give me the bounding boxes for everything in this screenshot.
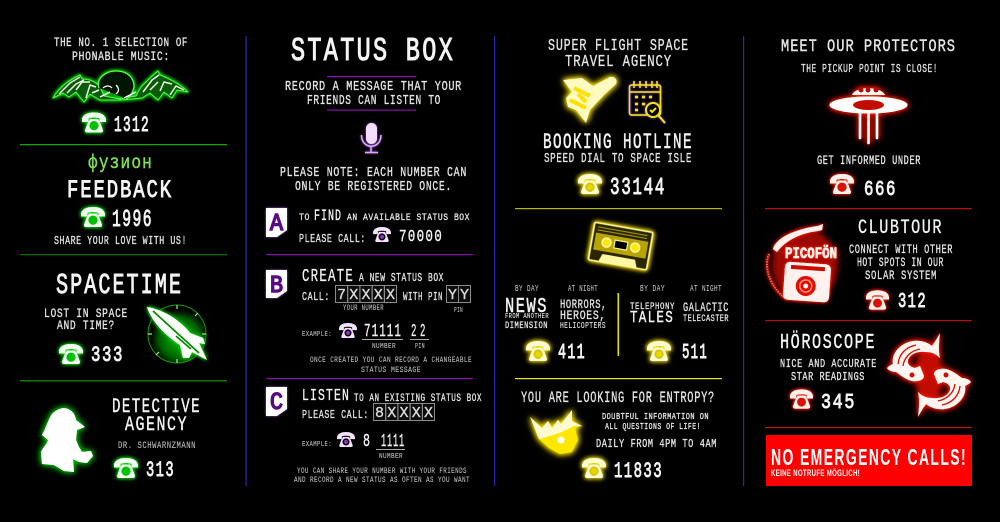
text: please note: ONLY BE REGISTERED ONCE. (295, 180, 452, 195)
text: record a message: RECORD A MESSAGE THAT YOUR (285, 80, 462, 95)
number example: 8 (363, 432, 370, 452)
text: connect (849, 243, 953, 283)
text: you can share: YOU CAN SHARE YOUR NUMBER WITH YOUR FRIENDS (297, 466, 467, 476)
icon: phone (526, 341, 550, 361)
program 511 labels (630, 284, 729, 328)
text: daily hours: DAILY FROM 4PM TO 4AM (596, 438, 717, 451)
callout: no emergency calls: KEINE NOTRUFE MÖGLICH! (771, 468, 860, 479)
program 511 labels: TELECASTER (683, 314, 729, 325)
panel: spacetime (44, 269, 207, 368)
text: star readings: NICE AND ACCURATE (780, 357, 877, 371)
panel: step C listen: 1111 (381, 432, 405, 452)
text: once created: STATUS MESSAGE (361, 365, 421, 375)
digit boxes: listen number: 8XXXX (375, 405, 433, 422)
heading: meet our protectors: MEET OUR PROTECTORS (781, 37, 956, 57)
icon: microphone (362, 123, 381, 152)
caption: your number: YOUR NUMBER (343, 304, 384, 313)
panel: feedback (54, 152, 187, 248)
program 411 labels: AT NIGHT (568, 284, 598, 294)
heading: status box: STATUS BOX (291, 33, 455, 70)
text: record a message (285, 80, 462, 109)
icon: phone (337, 432, 355, 447)
number 411: 411 (558, 342, 586, 365)
text: to find: FIND (314, 207, 342, 225)
icon: rocket clock (147, 305, 207, 363)
text: you can share: AND RECORD A NEW STATUS AS OFTEN AS YOU WANT (294, 475, 470, 485)
text: lost in space: AND TIME? (57, 318, 115, 333)
heading: horoscope: HÖROSCOPE (780, 331, 876, 355)
text: call: CALL: (302, 290, 330, 304)
text: once created (310, 355, 472, 375)
digit boxes: number: 7XXXX (337, 287, 395, 304)
program 511 labels: AT NIGHT (690, 284, 722, 294)
text: listen (302, 387, 482, 406)
number 345: 345 (821, 392, 856, 415)
panel: step B create: 22 (411, 322, 429, 342)
panel: phonable music (53, 35, 188, 138)
icon: red telephone (767, 224, 838, 303)
captions: number pin (372, 343, 425, 351)
panel: protectors (781, 37, 956, 202)
heading: clubtour: CLUBTOUR (858, 217, 943, 240)
program 411 labels: HORRORS, (560, 297, 607, 312)
text: please note: PLEASE NOTE: EACH NUMBER CAN (280, 166, 467, 181)
heading: looking for entropy: YOU ARE LOOKING FOR ENTROPY? (521, 389, 715, 407)
panel: status box intro (280, 33, 467, 195)
text: you can share (294, 466, 470, 485)
caption: number: NUMBER (379, 453, 403, 461)
number 313: 313 (146, 458, 175, 483)
heading: spacetime: SPACETIME (56, 269, 183, 302)
number example (363, 432, 405, 452)
icon: badge B: B (270, 273, 283, 300)
program 411 labels: FROM ANOTHER (505, 313, 549, 321)
icon: phone (647, 341, 671, 361)
heading: feedback: FEEDBACK (67, 176, 173, 205)
program 411 labels: NEWS (505, 296, 548, 319)
icon: phone (59, 344, 83, 364)
captions: number pin: NUMBER (372, 343, 396, 351)
text: doubtful information (602, 411, 709, 432)
text: once created: ONCE CREATED YOU CAN RECORD A CHANGEABLE (310, 355, 472, 365)
icon: ufo (830, 88, 908, 143)
text: to find: AN AVAILABLE STATUS BOX (347, 212, 470, 224)
number 11833: 11833 (614, 459, 663, 484)
icon: phone (373, 227, 391, 242)
text: doctor name: DR. SCHWARNZMANN (118, 440, 196, 452)
number 70000: 70000 (399, 228, 443, 247)
text: star readings: STAR READINGS (791, 370, 865, 384)
icon: badge C: C (270, 390, 283, 417)
text: create: CREATE (302, 267, 354, 287)
number 511: 511 (682, 342, 708, 365)
text: doubtful information: ALL QUESTIONS OF LIFE! (605, 421, 701, 432)
icon: phone (578, 174, 602, 194)
panel: space travel agency (543, 37, 693, 202)
text: please call: PLEASE CALL: (302, 408, 369, 422)
panel: step C listen (266, 387, 482, 485)
number 1996: 1996 (112, 207, 153, 234)
text: speed dial: SPEED DIAL TO SPACE ISLE (544, 152, 692, 167)
program 411 labels: DIMENSION (505, 320, 548, 332)
icon: badge A (266, 208, 287, 238)
icon: badge B (266, 270, 287, 300)
icon: phone (81, 207, 105, 227)
icon: detective silhouette (41, 408, 93, 472)
panel: entropy (521, 389, 717, 484)
icon: phone (82, 112, 106, 132)
icon: space shuttle (563, 77, 617, 123)
caption: pin: PIN (454, 307, 463, 315)
heading: detective agency: AGENCY (125, 414, 188, 437)
panel: detective agency (41, 396, 201, 483)
text: lost in space (44, 306, 128, 333)
icon: phone (866, 290, 889, 310)
heading: super flight space: SUPER FLIGHT SPACE (548, 37, 689, 56)
number 1312: 1312 (114, 113, 150, 138)
program 511 labels: GALACTIC (683, 301, 729, 315)
heading: detective agency (112, 396, 201, 437)
text: create (302, 267, 444, 287)
text: connect: CONNECT WITH OTHER (849, 243, 953, 257)
text: to find: TO (299, 213, 310, 224)
text: record a message: FRIENDS CAN LISTEN TO (307, 94, 441, 109)
icon: spiky creature (530, 410, 582, 454)
number 312: 312 (898, 291, 927, 314)
text: listen: LISTEN (302, 387, 350, 406)
text: star readings (780, 357, 877, 384)
heading: super flight space (548, 37, 689, 72)
icon: winged skull (53, 71, 188, 102)
panel: step A find (266, 207, 470, 247)
icon: badge C (266, 387, 287, 417)
icon: phone (114, 458, 138, 478)
icon: phone (830, 174, 854, 194)
heading: booking hotline: BOOKING HOTLINE (543, 130, 693, 155)
icon: badge A: A (270, 211, 284, 238)
program 511 labels: TALES (630, 309, 674, 328)
number 333: 333 (91, 343, 124, 368)
program 411 labels: HEROES, (560, 308, 606, 323)
text: connect: HOT SPOTS IN OUR (857, 256, 944, 270)
text: no. 1 selection (54, 35, 188, 64)
text: get informed: GET INFORMED UNDER (817, 154, 921, 168)
heading: detective agency: DETECTIVE (112, 396, 201, 419)
number example: 71111 (364, 322, 402, 342)
icon: cassette (588, 222, 653, 270)
callout: no emergency calls (766, 435, 972, 486)
text: with pin: WITH PIN (403, 290, 443, 304)
panel: day and night programs (505, 222, 729, 365)
text: create: A NEW STATUS BOX (359, 272, 444, 285)
text: share your love: SHARE YOUR LOVE WITH US! (54, 234, 187, 248)
icon: phone (339, 323, 357, 338)
program 411 labels (505, 284, 607, 332)
panel: clubtour (767, 217, 953, 314)
digit boxes: pin: YY (448, 287, 469, 304)
captions: number pin: PIN (415, 343, 425, 351)
number 33144: 33144 (610, 175, 666, 202)
caption: example: EXAMPLE: (302, 441, 332, 449)
icon: red telephone: PICOFÖN (785, 244, 837, 263)
text: lost in space: LOST IN SPACE (44, 306, 128, 321)
program 411 labels: BY DAY (515, 284, 539, 294)
panel: step B create (266, 267, 472, 375)
text: doubtful information: DOUBTFUL INFORMATION ON (602, 411, 709, 422)
text: to find (299, 207, 470, 225)
icon: phone (582, 458, 606, 478)
heading: cyrillic logo: фузион (88, 152, 153, 174)
program 411 labels: HELICOPTERS (560, 321, 606, 331)
text: no. 1 selection: THE NO. 1 SELECTION OF (54, 35, 188, 50)
text: listen: TO AN EXISTING STATUS BOX (354, 393, 482, 405)
icon: pisces fish (887, 333, 971, 417)
program 511 labels: TELEPHONY (630, 301, 675, 313)
text: connect: SOLAR SYSTEM (865, 269, 937, 283)
icon: calendar (630, 81, 665, 123)
panel: horoscope (780, 331, 971, 417)
caption: example: EXAMPLE: (302, 331, 332, 339)
text: no. 1 selection: PHONABLE MUSIC: (72, 49, 170, 64)
icon: phone (790, 389, 813, 409)
number 666: 666 (864, 179, 897, 202)
text: please call: PLEASE CALL: (299, 233, 366, 246)
text: please note (280, 166, 467, 195)
program 511 labels: BY DAY (640, 284, 665, 294)
heading: super flight space: TRAVEL AGENCY (565, 53, 672, 72)
